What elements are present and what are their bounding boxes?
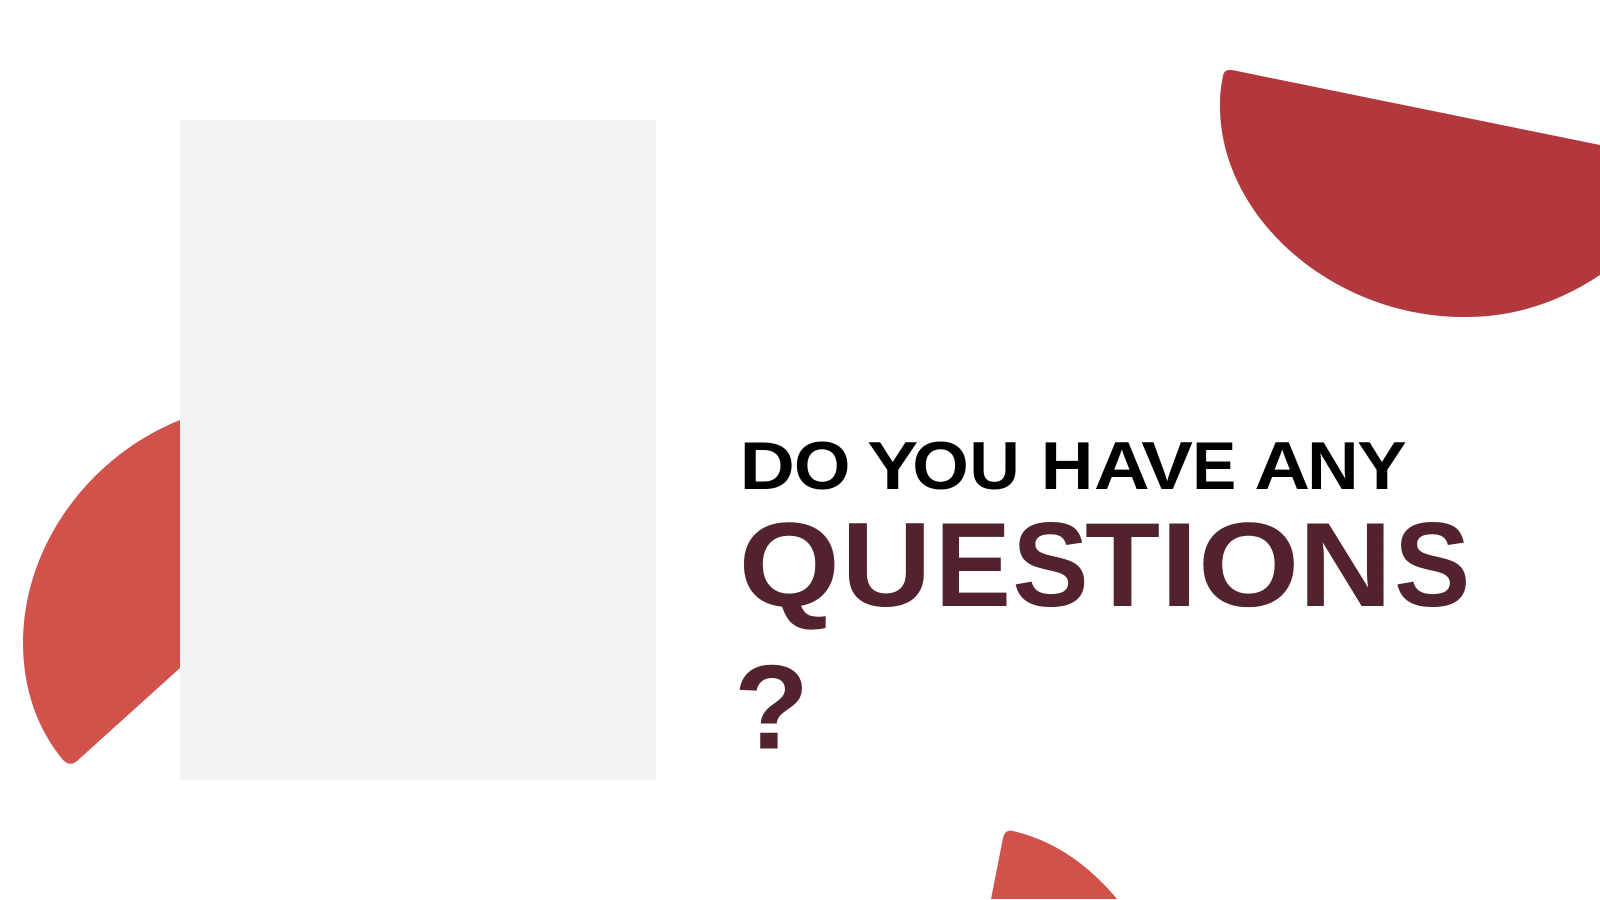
heading line: do you have any: D <box>740 429 795 504</box>
heading line: do you have any: H <box>1041 429 1094 504</box>
heading line: questions: E <box>935 498 1011 632</box>
heading line: do you have any: Y <box>1357 429 1407 504</box>
heading line: questions: T <box>1085 498 1160 632</box>
heading line: do you have any: A <box>1254 429 1310 504</box>
heading line: questions: Q <box>739 498 840 632</box>
heading line: do you have any: O <box>794 429 850 504</box>
shape: coral half-ellipse, left behind panel <box>23 420 180 764</box>
panel: light grey image placeholder <box>180 120 656 780</box>
heading line: questions: O <box>1198 498 1299 632</box>
heading line: questions: U <box>842 498 931 632</box>
heading line: do you have any: O <box>912 429 969 504</box>
heading line: do you have any: Y <box>867 429 918 504</box>
heading line: questions: S <box>1394 498 1470 632</box>
shape: dark red half-ellipse, top right <box>1220 70 1600 317</box>
heading line: questions: I <box>1160 498 1198 632</box>
heading line: do you have any: E <box>1192 429 1236 504</box>
heading line: do you have any: U <box>969 429 1020 504</box>
heading line: questions: S <box>1012 498 1089 632</box>
heading line: do you have any: V <box>1141 429 1193 504</box>
heading: title text <box>734 429 1470 774</box>
heading line: question mark: ? <box>734 640 809 774</box>
shape: coral segment, bottom edge <box>991 831 1117 899</box>
heading line: do you have any: A <box>1094 429 1150 504</box>
heading line: questions: N <box>1299 498 1392 632</box>
heading line: do you have any: N <box>1307 429 1359 504</box>
